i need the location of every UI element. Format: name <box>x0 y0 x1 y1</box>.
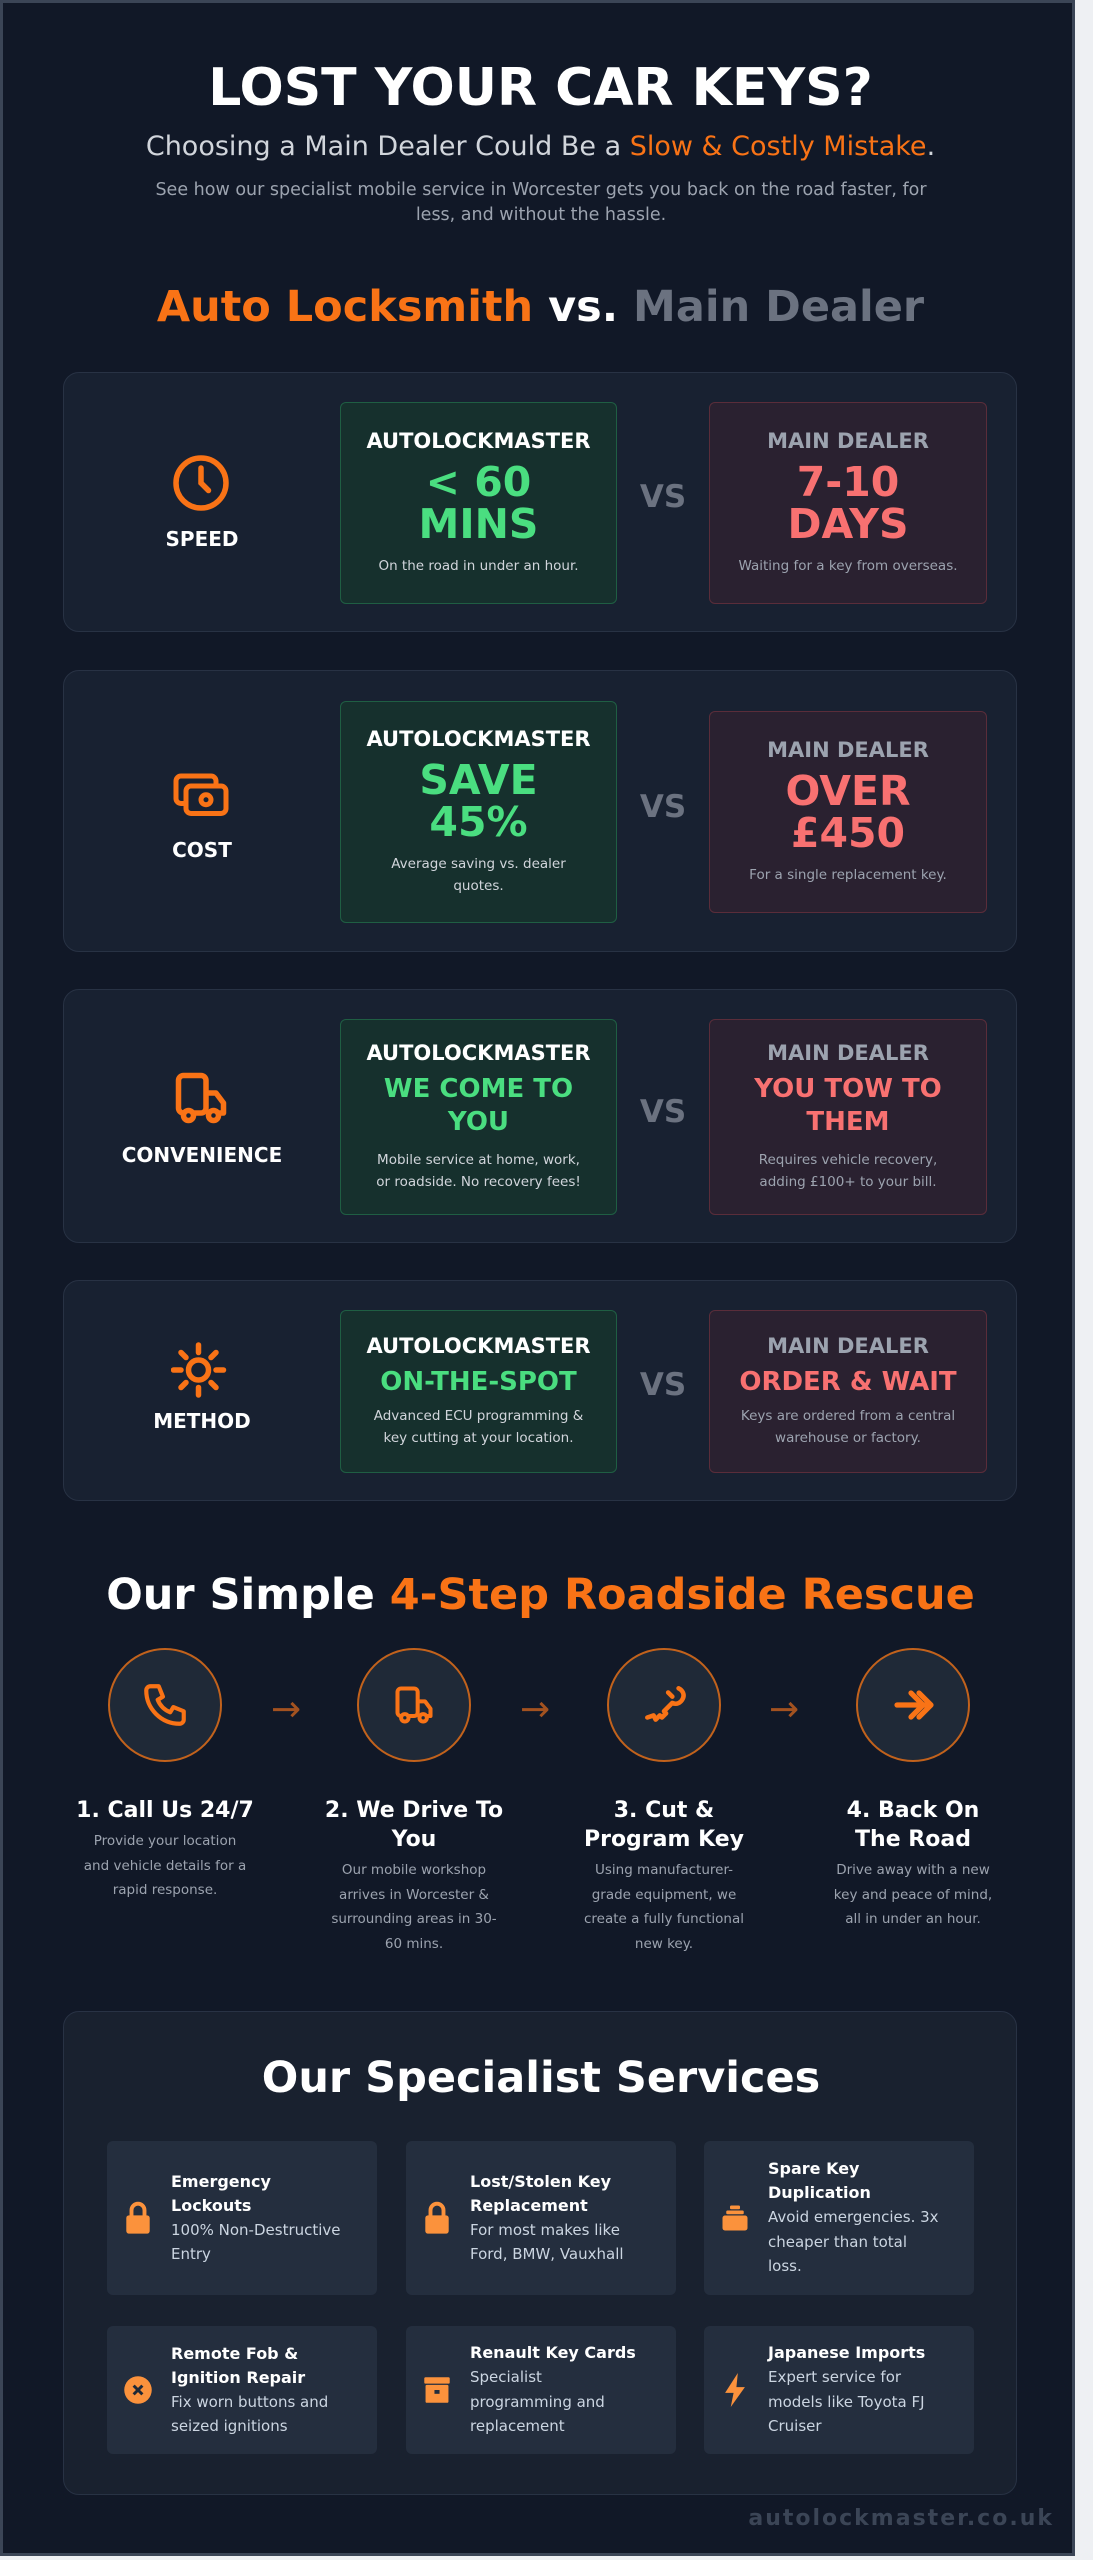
vs: VS <box>640 789 686 825</box>
icon: key <box>607 1648 721 1762</box>
label: cost: COST <box>172 838 232 862</box>
vs: VS <box>640 1367 686 1403</box>
label: method: METHOD <box>153 1409 251 1433</box>
step 2: Our mobile workshop arrives in Worcester & surrounding areas in 30-60 mins. <box>331 1862 497 1952</box>
autolockmaster box: On the road in under an hour. <box>378 558 579 574</box>
main dealer box: OVER <box>785 767 911 815</box>
arrow 1: → <box>271 1689 301 1730</box>
vs: VS <box>640 1094 686 1130</box>
card: spare key: Spare Key <box>768 2159 859 2178</box>
autolockmaster box: SAVE <box>419 756 538 804</box>
main dealer box: DAYS <box>787 500 909 548</box>
panel: services <box>63 2011 1017 2495</box>
autolockmaster box: 45% <box>429 798 528 846</box>
step 4: The Road <box>855 1827 971 1852</box>
arrow 3: → <box>769 1689 799 1730</box>
panel: speed <box>63 372 1017 632</box>
panel: cost <box>63 670 1017 952</box>
autolockmaster box: < 60 <box>426 458 531 506</box>
autolockmaster box: AUTOLOCKMASTER <box>366 429 591 453</box>
footer url: autolockmaster.co.uk <box>748 2506 1054 2531</box>
comparison heading: Auto Locksmith vs. Main Dealer <box>157 282 924 332</box>
card: renault <box>406 2326 676 2454</box>
card: lost/stolen: Ford, BMW, Vauxhall <box>470 2245 624 2263</box>
main dealer box: adding £100+ to your bill. <box>759 1174 937 1190</box>
card: remote fob: Fix worn buttons and seized ignitions <box>171 2392 328 2435</box>
autolockmaster box: WE COME TO <box>384 1074 573 1104</box>
card: renault: Specialist <box>470 2368 542 2386</box>
card: remote fob: Ignition Repair <box>171 2368 305 2386</box>
subtitle: Choosing a Main Dealer Could Be a Slow & Costly Mistake. <box>146 131 935 162</box>
main dealer box: THEM <box>806 1107 890 1137</box>
step 3: 3. Cut & Program Key <box>584 1798 744 1852</box>
autolockmaster box: Mobile service at home, work, <box>377 1152 580 1168</box>
icon: arrow <box>856 1648 970 1762</box>
main dealer box: Keys are ordered from a central warehouse or factory. <box>741 1408 955 1446</box>
card: emergency lockouts: Emergency <box>171 2172 271 2190</box>
main dealer box: MAIN DEALER <box>767 1334 929 1358</box>
icon: truck <box>357 1648 471 1762</box>
card: lost/stolen: Replacement <box>470 2196 588 2214</box>
main dealer box: YOU TOW TO <box>754 1074 942 1104</box>
autolockmaster box: AUTOLOCKMASTER <box>366 1041 591 1065</box>
step 2 <box>325 1648 503 1952</box>
card: renault: Renault Key Cards <box>470 2343 636 2362</box>
card: japanese imports: models like Toyota FJ <box>768 2393 925 2411</box>
steps heading: Our Simple 4-Step Roadside Rescue <box>106 1570 975 1620</box>
autolockmaster box: AUTOLOCKMASTER <box>366 727 591 751</box>
card: remote fob <box>107 2326 377 2454</box>
vs: VS <box>640 479 686 515</box>
card: emergency lockouts: 100% Non-Destructive Entry <box>171 2220 341 2263</box>
step 2: 2. We Drive To You <box>325 1798 503 1852</box>
main dealer box: 7-10 <box>797 458 899 506</box>
autolockmaster box: or roadside. No recovery fees! <box>376 1174 581 1190</box>
card: japanese imports <box>704 2326 974 2454</box>
main dealer box: ORDER & WAIT <box>739 1367 957 1397</box>
main dealer box <box>709 1310 987 1473</box>
icon: gear <box>171 1342 226 1398</box>
main dealer box: MAIN DEALER <box>767 1041 929 1065</box>
main dealer box: MAIN DEALER <box>767 429 929 453</box>
card: spare key: cheaper than total <box>768 2233 907 2251</box>
intro text: See how our specialist mobile service in Worcester gets you back on the road faster, for less, and without the hassle. <box>155 180 927 225</box>
card: spare key <box>704 2141 974 2295</box>
main dealer box <box>709 711 987 913</box>
main dealer box <box>709 402 987 604</box>
title: LOST YOUR CAR KEYS? <box>208 58 873 118</box>
main dealer box: Requires vehicle recovery, <box>759 1152 937 1168</box>
autolockmaster box: Advanced ECU programming & <box>374 1408 583 1424</box>
card: emergency lockouts <box>107 2141 377 2295</box>
services heading: Our Specialist Services <box>262 2053 820 2103</box>
card: japanese imports: Cruiser <box>768 2417 822 2435</box>
panel: method <box>63 1280 1017 1501</box>
main dealer box: Waiting for a key from overseas. <box>738 558 958 574</box>
autolockmaster box: ON-THE-SPOT <box>380 1367 577 1397</box>
card: renault: programming and <box>470 2393 605 2411</box>
arrow 2: → <box>520 1689 550 1730</box>
card: lost/stolen: Lost/Stolen Key <box>470 2172 611 2190</box>
card: spare key: Avoid emergencies. 3x <box>768 2208 939 2226</box>
card: emergency lockouts: Lockouts <box>171 2196 251 2214</box>
autolockmaster box <box>340 701 617 923</box>
card: lost/stolen <box>406 2141 676 2295</box>
main dealer box <box>709 1019 987 1215</box>
panel: convenience <box>63 989 1017 1243</box>
label: convenience: CONVENIENCE <box>122 1143 282 1167</box>
step 3: Using manufacturer-grade equipment, we create a fully functional new key. <box>584 1862 744 1952</box>
icon: truck <box>176 1072 226 1124</box>
step 1 <box>76 1648 254 1898</box>
step 1: Provide your location and vehicle details for a rapid response. <box>84 1833 246 1898</box>
step 4: 4. Back On <box>847 1798 979 1823</box>
autolockmaster box <box>340 1310 617 1473</box>
card: spare key: Duplication <box>768 2183 871 2202</box>
icon: cash <box>174 774 228 816</box>
autolockmaster box: YOU <box>448 1107 509 1137</box>
autolockmaster box: MINS <box>419 500 538 548</box>
step 3 <box>584 1648 744 1952</box>
step 1: 1. Call Us 24/7 <box>76 1798 254 1823</box>
step 4 <box>834 1648 992 1927</box>
card: japanese imports: Japanese Imports <box>768 2343 925 2362</box>
icon: phone <box>108 1648 222 1762</box>
step 4: Drive away with a new key and peace of mind, all in under an hour. <box>834 1862 992 1927</box>
autolockmaster box <box>340 402 617 604</box>
card: renault: replacement <box>470 2417 565 2435</box>
autolockmaster box: AUTOLOCKMASTER <box>366 1334 591 1358</box>
main dealer box: £450 <box>791 809 905 857</box>
card: remote fob: Remote Fob & <box>171 2344 298 2362</box>
card: spare key: loss. <box>768 2257 802 2275</box>
main dealer box: For a single replacement key. <box>749 867 947 883</box>
icon: clock <box>173 455 229 511</box>
main dealer box: MAIN DEALER <box>767 738 929 762</box>
autolockmaster box: quotes. <box>453 878 504 894</box>
autolockmaster box: Average saving vs. dealer <box>391 856 566 872</box>
autolockmaster box <box>340 1019 617 1215</box>
card: lost/stolen: For most makes like <box>470 2220 620 2238</box>
autolockmaster box: key cutting at your location. <box>383 1430 574 1446</box>
card: japanese imports: Expert service for <box>768 2368 901 2386</box>
label: speed: SPEED <box>166 527 238 551</box>
